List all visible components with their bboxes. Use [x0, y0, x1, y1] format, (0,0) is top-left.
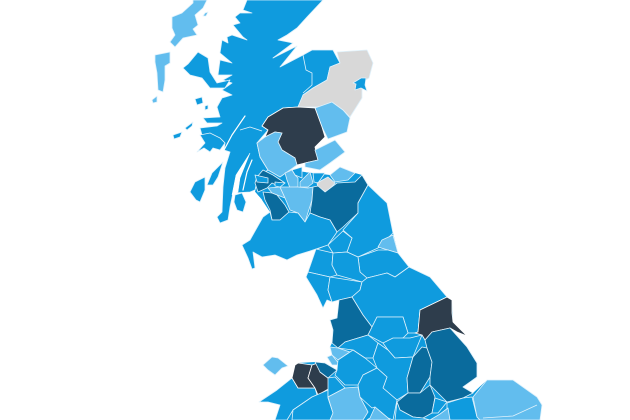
region: Derbyshire	[373, 343, 413, 400]
region: Staffordshire	[358, 368, 397, 420]
region: Lancashire	[330, 297, 372, 348]
region: Scottish Borders	[310, 175, 368, 232]
region: Wrexham	[328, 377, 345, 397]
region: West Midlands	[367, 407, 390, 420]
region: Shropshire	[328, 387, 368, 420]
region: Greater Manchester	[338, 335, 378, 358]
region: Perthshire	[262, 107, 325, 165]
region: Lanarkshire	[280, 187, 313, 222]
region: Tyne and Wear	[378, 235, 398, 253]
region: Flintshire	[315, 362, 337, 378]
region: Dumfries and Galloway	[242, 212, 337, 269]
region: Anglesey	[263, 357, 288, 375]
region: Denbighshire	[308, 363, 330, 395]
region: Central Belt	[285, 167, 355, 192]
region: Powys	[292, 390, 333, 420]
region: Stirling	[257, 132, 297, 177]
region: East Riding	[415, 297, 467, 340]
region: Outer Hebrides	[152, 0, 208, 103]
island: Arran	[234, 193, 246, 212]
region: Fife	[305, 140, 345, 170]
region: Glasgow and Renfrewshire	[255, 170, 289, 220]
region: Cheshire	[335, 350, 377, 385]
region: Durham	[358, 250, 409, 278]
region: Yorkshire	[352, 267, 447, 333]
region: Midlands east	[395, 397, 480, 420]
base land: southern Scotland, England and Wales	[242, 167, 542, 420]
region: Scottish Highlands and Argyll	[173, 0, 340, 223]
region: Lincolnshire	[425, 328, 477, 402]
region: Nottinghamshire	[407, 347, 432, 393]
region: Cumbria	[306, 231, 367, 308]
region: Aberdeenshire	[298, 50, 373, 117]
region: Angus	[315, 102, 350, 139]
icon: Aberdeen city	[353, 78, 367, 91]
region: West Yorkshire	[368, 317, 408, 343]
region: Leicestershire	[397, 385, 435, 418]
region: Conwy	[292, 363, 315, 388]
region: Northumberland	[343, 185, 393, 257]
region: Merseyside	[327, 347, 350, 365]
region: Norfolk and Suffolk	[473, 380, 542, 420]
Firth of Forth	[297, 165, 340, 174]
region: Gwynedd	[259, 378, 317, 420]
region: South Yorkshire	[383, 335, 422, 358]
